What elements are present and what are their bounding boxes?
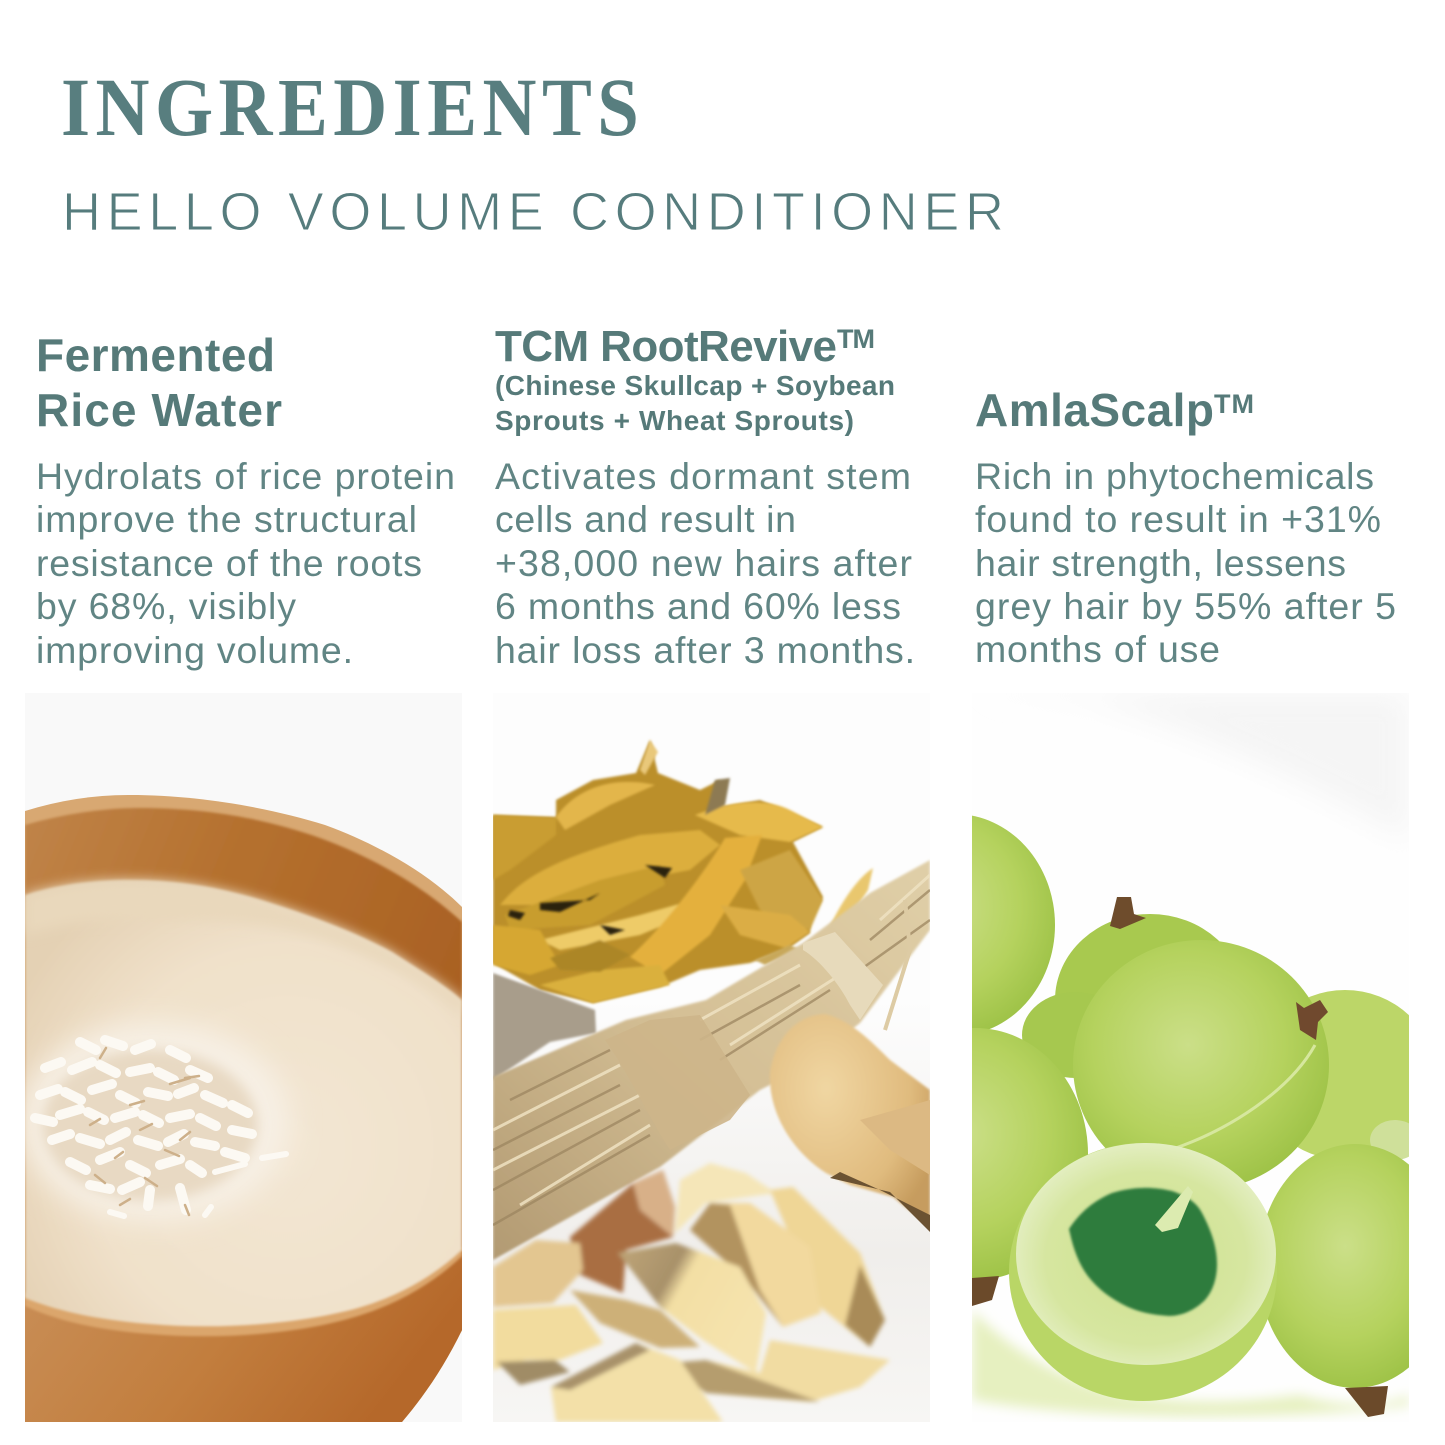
rice water xyxy=(25,880,462,1326)
heading: TCM RootRevive: TCM RootRevive xyxy=(495,322,837,371)
description: TCM RootRevive: Activates dormant stem xyxy=(495,455,911,497)
title: INGREDIENTS xyxy=(61,62,639,154)
panel: rice water photo xyxy=(25,795,462,1422)
stem: upper back fruit xyxy=(1110,897,1146,929)
stem: left fruit xyxy=(972,1276,999,1306)
description: Fermented Rice Water: resistance of the roots xyxy=(36,542,422,584)
trademark: TM xyxy=(1214,389,1254,419)
amla fruit: small back xyxy=(1022,995,1074,1078)
surface reflection xyxy=(972,1310,1409,1416)
amla fruit: main large xyxy=(1073,940,1329,1190)
trademark: TM xyxy=(837,324,875,354)
description: Fermented Rice Water: by 68%, visibly xyxy=(36,585,296,627)
column 2 text: TCM RootRevive xyxy=(495,322,915,671)
binding knot xyxy=(638,1015,750,1136)
description: Fermented Rice Water: improving volume. xyxy=(36,629,353,671)
amla fruit: lower right xyxy=(1267,1144,1409,1388)
amla fruit: upper back xyxy=(1055,914,1220,996)
sub-ingredients: (Chinese Skullcap + Soybean xyxy=(495,370,895,401)
panel: amla fruit photo xyxy=(972,706,1409,1422)
soft background shade xyxy=(1206,712,1390,804)
seam on main fruit xyxy=(1170,1045,1315,1150)
amla fruit: left middle xyxy=(972,1028,1088,1278)
sliced roots xyxy=(493,1163,890,1422)
description: TCM RootRevive: +38,000 new hairs after xyxy=(495,542,912,584)
description: TCM RootRevive: cells and result in xyxy=(495,498,796,540)
heading: Fermented Rice Water: Fermented xyxy=(36,329,275,381)
description: AmlaScalp: hair strength, lessens xyxy=(975,542,1346,584)
amla fruit: top left xyxy=(972,816,1055,1030)
stray fibre xyxy=(885,900,910,1030)
subtitle: HELLO VOLUME CONDITIONER xyxy=(62,182,1004,242)
column 3 text: AmlaScalp xyxy=(975,384,1396,670)
description: Fermented Rice Water: Hydrolats of rice protein xyxy=(36,455,455,497)
description: TCM RootRevive: hair loss after 3 months. xyxy=(495,629,915,671)
amla fruit: pale rear sliver xyxy=(1370,1120,1409,1160)
ginseng root xyxy=(770,1014,930,1232)
sub-ingredients: Sprouts + Wheat Sprouts) xyxy=(495,405,854,436)
description: AmlaScalp: Rich in phytochemicals xyxy=(975,455,1374,497)
dried skullcap leaves xyxy=(493,740,873,1003)
amla fruit: cut half xyxy=(1009,1143,1277,1401)
description: AmlaScalp: grey hair by 55% after 5 xyxy=(975,585,1396,627)
stem: lower right fruit xyxy=(1345,1386,1388,1417)
column 1 text: Fermented Rice Water xyxy=(36,329,455,671)
description: AmlaScalp: months of use xyxy=(975,628,1220,670)
rice pile xyxy=(20,1022,290,1222)
grey bark xyxy=(493,973,596,1080)
amla fruit: far right xyxy=(1298,990,1409,1155)
stem: main fruit xyxy=(1296,1000,1328,1040)
wooden bowl xyxy=(25,795,462,1422)
description: TCM RootRevive: 6 months and 60% less xyxy=(495,585,901,627)
table surface xyxy=(493,1114,930,1422)
description: Fermented Rice Water: improve the structural xyxy=(36,498,417,540)
heading: Fermented Rice Water: Rice Water xyxy=(36,384,282,436)
description: TCM RootRevive xyxy=(495,455,915,671)
upper binding xyxy=(803,932,883,1020)
panel: TCM roots and herbs photo xyxy=(493,693,930,1422)
sprout xyxy=(1155,1186,1193,1232)
seed xyxy=(1069,1188,1217,1316)
description: Fermented Rice Water xyxy=(36,455,455,671)
heading: Fermented Rice Water xyxy=(36,329,282,436)
heading: AmlaScalp: AmlaScalp xyxy=(975,384,1214,436)
description: AmlaScalp: found to result in +31% xyxy=(975,498,1381,540)
root bundle xyxy=(493,860,930,1260)
description: AmlaScalp xyxy=(975,455,1396,670)
sub-ingredients xyxy=(495,370,895,436)
